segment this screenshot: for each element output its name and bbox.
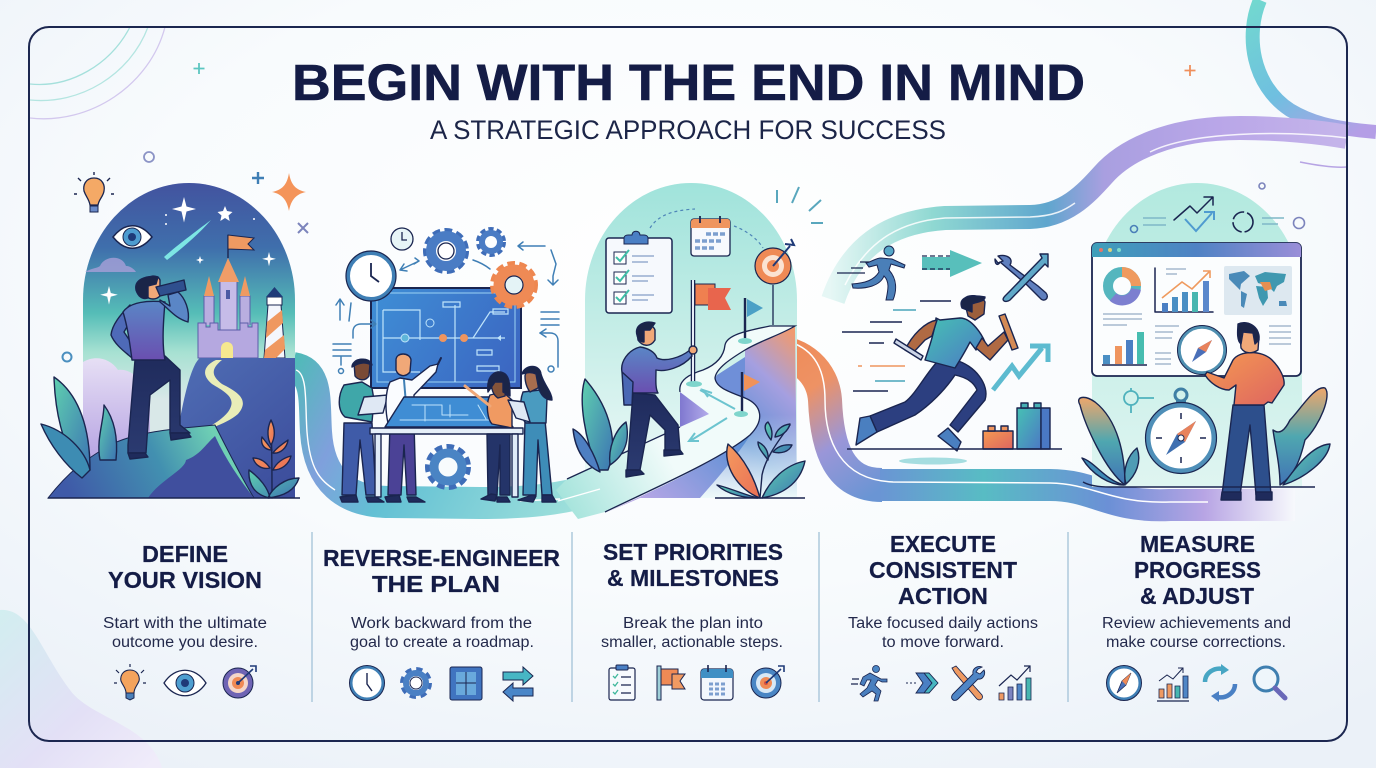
- clipboard: [606, 231, 672, 313]
- column 1: define your vision: [103, 541, 267, 700]
- teal flag: [738, 298, 763, 344]
- target on pole: [755, 239, 794, 325]
- icon: bulb: [114, 664, 146, 700]
- drafting table: [370, 397, 523, 497]
- column 3: priorities and milestones: [601, 539, 784, 700]
- small bars: [1102, 332, 1147, 365]
- runner: [856, 296, 1018, 451]
- subtitle: A STRATEGIC APPROACH FOR SUCCESS: [430, 115, 946, 145]
- body text: [350, 615, 534, 651]
- decoration: top right ribbon: [1253, 0, 1376, 132]
- leaves left: [1079, 397, 1139, 485]
- heading: THE PLAN: [372, 571, 500, 597]
- heading: MEASURE: [1140, 531, 1255, 557]
- big compass: [1146, 389, 1216, 474]
- icon runner: [837, 246, 905, 300]
- icon: swap arrows: [503, 667, 533, 701]
- decoration: top right thin arc: [1300, 162, 1347, 167]
- lighthouse: [264, 287, 285, 358]
- icon: clipboard: [609, 665, 635, 700]
- illustration 4: execute consistent action: [837, 246, 1062, 464]
- heading: SET PRIORITIES: [603, 539, 783, 565]
- heading: CONSISTENT: [869, 557, 1017, 583]
- body text: [601, 615, 783, 651]
- icon: arrows: [906, 673, 938, 693]
- icon: tools: [952, 666, 985, 700]
- blocks: [983, 403, 1050, 449]
- body text: Work backward from the: [351, 615, 532, 632]
- icon: small ring: [62, 352, 72, 362]
- body text: goal to create a roadmap.: [350, 634, 534, 651]
- icon: calendar: [701, 665, 733, 700]
- heading: & MILESTONES: [607, 565, 779, 591]
- icon: clock: [350, 666, 384, 700]
- gear small: [478, 230, 504, 254]
- dashboard window: [1092, 243, 1301, 376]
- ground line: [847, 448, 1062, 450]
- right plant: [249, 420, 299, 498]
- ribbon: first connector: [293, 368, 600, 503]
- icon arrow: [922, 250, 982, 277]
- road outlines: [567, 326, 795, 512]
- rising arrow: [993, 346, 1048, 390]
- column 2: reverse-engineer the plan: [323, 545, 560, 701]
- ground line: [1083, 482, 1315, 487]
- person left: [339, 359, 388, 502]
- plant left: [573, 379, 627, 472]
- orange small flag: [734, 372, 760, 417]
- person pointing: [385, 354, 441, 502]
- gear blue large: [427, 232, 465, 270]
- icon row: [851, 666, 1031, 701]
- body text: to move forward.: [882, 634, 1004, 651]
- front hill: [48, 425, 254, 498]
- decoration: corner blob bottom left: [0, 610, 162, 768]
- rock: [148, 436, 254, 498]
- heading: [323, 545, 560, 597]
- leaves right: [1273, 388, 1330, 485]
- icon: target: [223, 666, 256, 698]
- body text: Take focused daily actions: [848, 615, 1038, 632]
- cliff fade: [700, 415, 797, 498]
- heading: REVERSE-ENGINEER: [323, 545, 560, 571]
- big clock: [346, 251, 396, 301]
- big flag: [686, 280, 731, 387]
- comet: [164, 220, 211, 260]
- ground line: [48, 497, 300, 499]
- heading: [603, 539, 783, 591]
- decoration: top left arcs: [30, 27, 165, 119]
- back hill: [172, 358, 295, 498]
- winding road: [178, 360, 243, 440]
- ground line: [715, 497, 805, 499]
- icon: target: [751, 666, 784, 698]
- runner shadow: [899, 458, 967, 464]
- icon: x mark: [298, 223, 308, 233]
- cliff triangle: [680, 392, 709, 427]
- dividers: [312, 532, 1068, 702]
- icon: eye: [164, 670, 206, 696]
- arch sky: [83, 183, 295, 498]
- icon: bars trend: [999, 666, 1031, 700]
- body text: Start with the ultimate: [103, 615, 267, 632]
- arch: [1092, 183, 1302, 487]
- heading: [869, 531, 1017, 609]
- left leaves: [41, 377, 117, 478]
- lavender clouds: [83, 358, 150, 470]
- plant right: [717, 422, 805, 498]
- icon row: [350, 666, 533, 701]
- icon row: [1106, 664, 1285, 702]
- icon tools: [995, 254, 1048, 301]
- person orange shirt: [465, 372, 512, 502]
- donut chart: [1108, 272, 1136, 300]
- heading: DEFINE: [142, 541, 228, 567]
- icon: orange sparkle: [272, 173, 306, 211]
- illustration 5: measure progress and adjust: [1079, 183, 1330, 500]
- lens compass: [1178, 326, 1226, 374]
- icon: lightbulb: [74, 172, 114, 212]
- icon: runner: [851, 666, 887, 701]
- illustration 3: priorities and milestones: [556, 183, 823, 519]
- arch: [585, 183, 797, 498]
- title: BEGIN WITH THE END IN MIND: [292, 54, 1085, 111]
- eye: [113, 226, 152, 248]
- heading: [1134, 531, 1261, 609]
- cloud top: [85, 258, 136, 272]
- person with binoculars: [111, 276, 191, 459]
- small clock: [391, 228, 413, 250]
- road: [556, 326, 795, 519]
- body text: outcome you desire.: [112, 634, 258, 651]
- column 5: measure progress and adjust: [1102, 531, 1291, 702]
- top small icons: [1130, 183, 1304, 232]
- icon row: [114, 664, 256, 700]
- body text: [848, 615, 1038, 651]
- illustration 2: reverse-engineer the plan: [333, 228, 559, 502]
- icon: gear: [402, 670, 430, 696]
- heading: YOUR VISION: [108, 567, 262, 593]
- heading: ACTION: [898, 583, 988, 609]
- speed lines: [842, 301, 951, 391]
- line bar chart: [1155, 268, 1213, 312]
- icon: blueprint: [450, 667, 482, 700]
- world map: [1224, 266, 1292, 315]
- person with compass: [1205, 323, 1284, 500]
- castle: [198, 235, 258, 358]
- column 4: execute consistent action: [848, 531, 1038, 701]
- heading: & ADJUST: [1140, 583, 1254, 609]
- heading: [108, 541, 262, 593]
- illustration 1: define your vision: [41, 183, 300, 498]
- icon: flag: [657, 666, 685, 700]
- icon: small blue plus: [252, 172, 264, 184]
- ribbon: orange connector: [773, 342, 1295, 505]
- road band white line: [558, 489, 600, 501]
- process arrows: [333, 242, 559, 374]
- heading: EXECUTE: [890, 531, 996, 557]
- burst ticks: [777, 187, 823, 223]
- gear orange: [494, 265, 534, 305]
- road lower cliff: [607, 326, 797, 512]
- top flowing ribbon: [833, 128, 1347, 300]
- decoration: plus signs and circles: [144, 63, 1196, 162]
- crosshair: [1124, 388, 1154, 413]
- icon: compass: [1106, 666, 1142, 700]
- blueprint board: [371, 288, 521, 388]
- person blue: [508, 366, 556, 502]
- icon: chart: [1157, 668, 1189, 701]
- calendar: [691, 216, 730, 256]
- person climbing: [622, 322, 697, 477]
- gear bottom: [429, 448, 467, 486]
- icon row: [609, 665, 784, 700]
- body text: make course corrections.: [1106, 634, 1286, 651]
- body text: Break the plan into: [623, 615, 763, 632]
- body text: [1102, 615, 1291, 651]
- icon: magnifier: [1254, 667, 1285, 698]
- stars: [100, 197, 276, 305]
- body text: Review achievements and: [1102, 615, 1291, 632]
- dotted paths and ticks: [650, 209, 763, 248]
- body text: smaller, actionable steps.: [601, 634, 783, 651]
- icon: cycle arrows: [1205, 664, 1235, 702]
- heading: PROGRESS: [1134, 557, 1261, 583]
- body text: [103, 615, 267, 651]
- cliff upper section: [715, 357, 745, 398]
- road arrows: [689, 390, 735, 441]
